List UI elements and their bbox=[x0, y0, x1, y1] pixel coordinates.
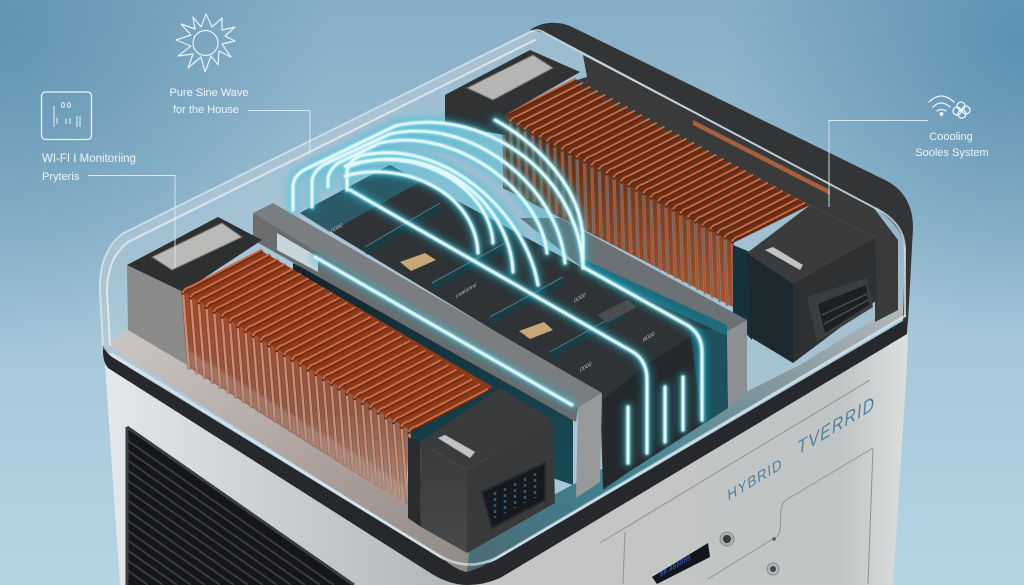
label plate bbox=[152, 223, 242, 270]
knob top bbox=[720, 532, 734, 546]
back rim of lid bbox=[530, 23, 913, 322]
indicator bar bbox=[438, 435, 475, 458]
module print marks: 0000 bbox=[574, 292, 586, 305]
rear grey frame bar bbox=[520, 218, 747, 407]
gold chip 1 bbox=[400, 253, 436, 271]
teal end face bbox=[690, 327, 728, 424]
module print marks: 8000 bbox=[643, 331, 655, 344]
glowing cable lines bbox=[293, 120, 702, 463]
label: Coooling bbox=[929, 131, 973, 143]
module divisions bbox=[365, 208, 625, 357]
callout: Cooling System: Sooles System bbox=[915, 147, 989, 159]
dark band around base of lid bbox=[103, 318, 908, 585]
icon: wifi and cooling cluster bbox=[929, 96, 970, 118]
brand label: HYBRID bbox=[727, 455, 783, 505]
teal front glow bbox=[300, 165, 420, 232]
connector block bbox=[597, 300, 637, 323]
label plate bbox=[467, 55, 553, 100]
brand label: TVERRID bbox=[797, 391, 876, 459]
right rear block with label plate bbox=[445, 50, 580, 135]
device body: hybrid inverter housing bbox=[104, 325, 908, 585]
connector port bbox=[482, 463, 545, 528]
gold chip 2 bbox=[519, 322, 553, 339]
glass lid interior bbox=[100, 30, 905, 565]
front vertical ribs face bbox=[603, 333, 727, 488]
knob lower bbox=[767, 563, 779, 575]
module print marks: cuaisons bbox=[456, 282, 476, 300]
display bbox=[652, 543, 710, 584]
panel seams bbox=[600, 380, 873, 584]
right front block bbox=[733, 205, 877, 363]
label: Pure Sine Wave bbox=[169, 87, 249, 99]
right face bbox=[470, 325, 908, 585]
front grey frame bar bbox=[253, 203, 602, 498]
frame window bbox=[277, 233, 318, 272]
right copper heat exchanger bbox=[503, 79, 810, 309]
left front block bbox=[408, 388, 555, 553]
leader line bbox=[88, 176, 175, 268]
module print marks: 0000 bbox=[580, 361, 592, 374]
indicator bar bbox=[765, 247, 803, 270]
icon: sun bbox=[176, 14, 235, 72]
module print marks: +0000 bbox=[328, 222, 343, 237]
rear copper strip bbox=[693, 120, 830, 195]
teal stripe under rear bar bbox=[585, 260, 727, 336]
leader line bbox=[248, 110, 310, 155]
icon: ventilation grille bbox=[127, 427, 354, 585]
icon: monitoring box bbox=[42, 92, 92, 140]
centre battery and inverter module bbox=[300, 165, 728, 490]
left rear block with label plate bbox=[127, 217, 262, 365]
label: WI-FI I Monitoriing bbox=[42, 153, 136, 165]
callout: Pure Sine Wave bbox=[169, 14, 310, 155]
floor right bbox=[467, 300, 905, 572]
left copper heat exchanger bbox=[183, 250, 493, 507]
floor left bbox=[106, 329, 470, 572]
brand label bbox=[727, 391, 876, 505]
display: 88 888888 bbox=[660, 554, 691, 579]
left dark teal panel bbox=[293, 263, 573, 485]
module print marks bbox=[328, 222, 655, 374]
callout: Wi-Fi Monitoring bbox=[42, 92, 175, 268]
callout: Wi-Fi Monitoring: Pryteris bbox=[42, 171, 80, 183]
callout: Cooling System bbox=[829, 96, 989, 207]
left face bbox=[104, 350, 470, 585]
leader line bbox=[829, 120, 928, 207]
rear housing behind copper bbox=[570, 55, 898, 322]
connector port bbox=[807, 278, 873, 342]
dark top surface bbox=[300, 165, 728, 490]
glass lid edge bbox=[100, 30, 905, 565]
callout: Pure Sine Wave: for the House bbox=[173, 104, 239, 116]
